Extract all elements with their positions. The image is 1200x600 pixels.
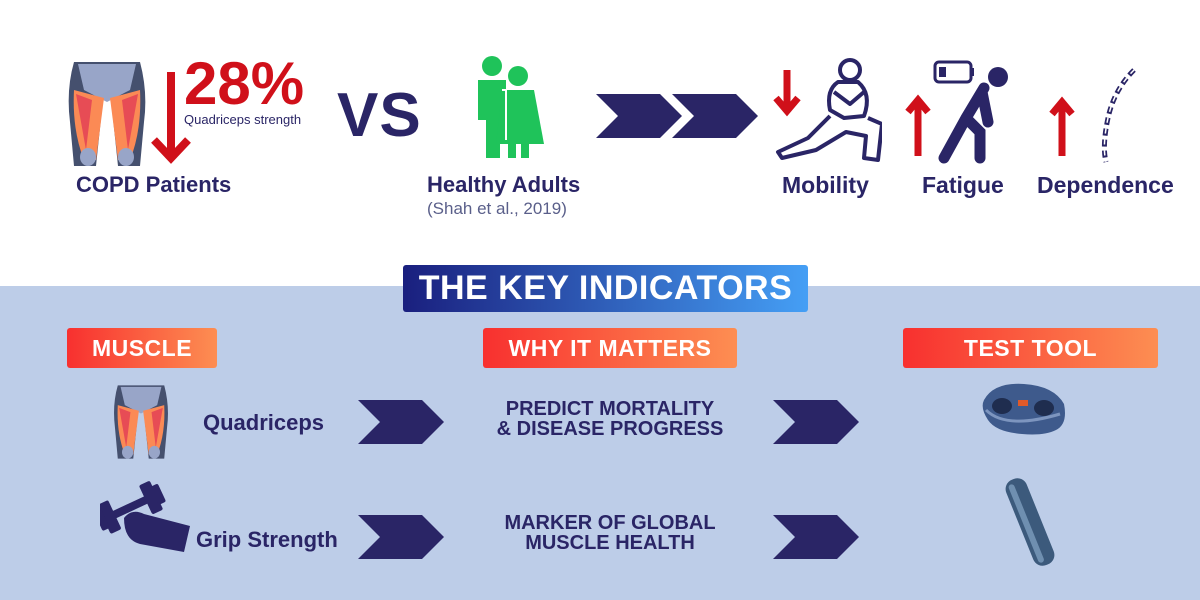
background band [0, 286, 1200, 600]
header: TEST TOOL: TEST TOOL [964, 335, 1097, 361]
row 1 text [497, 398, 723, 440]
icon: down arrow red [151, 72, 191, 164]
label: Mobility: Mobility [782, 172, 869, 198]
row 1 text: PREDICT MORTALITY [506, 398, 714, 420]
row 2 text: MUSCLE HEALTH [525, 532, 695, 554]
row 2 text: MARKER OF GLOBAL [504, 512, 716, 534]
row 1 icon: quadriceps [114, 385, 168, 459]
icon: healthy adults [478, 56, 544, 158]
label: Healthy Adults: Healthy Adults [427, 172, 580, 197]
header: MUSCLE [67, 328, 217, 368]
row 1 arrow [358, 400, 444, 444]
header: MUSCLE: MUSCLE [92, 335, 192, 361]
header: TEST TOOL [903, 328, 1158, 368]
icon: fatigue [905, 60, 1008, 164]
row 2 arrow 2 [773, 515, 859, 559]
row 2 label: Grip Strength [196, 527, 338, 552]
icon: quadriceps legs top [68, 62, 146, 166]
label: Dependence: Dependence [1037, 172, 1174, 198]
row 1 text: & DISEASE PROGRESS [497, 418, 723, 440]
label: Fatigue: Fatigue [922, 172, 1004, 198]
icon: mobility [773, 58, 882, 162]
row 2 arrow [358, 515, 444, 559]
stat 28%: 28% [184, 50, 304, 117]
header: WHY IT MATTERS [483, 328, 737, 368]
header: WHY IT MATTERS: WHY IT MATTERS [509, 335, 711, 361]
row 1 arrow 2 [773, 400, 859, 444]
arrow: double chevron [596, 94, 758, 138]
row 2 text [504, 512, 716, 554]
title banner: THE KEY INDICATORS [419, 269, 792, 307]
row 2 tool: grip dynamometer [1006, 478, 1054, 566]
label: COPD Patients: COPD Patients [76, 172, 231, 197]
citation: (Shah et al., 2019) [427, 199, 567, 218]
row 1 label: Quadriceps [203, 410, 324, 435]
row 2 icon: dumbbell hand [100, 481, 190, 552]
icon: dependence [1049, 68, 1136, 163]
text: VS: VS [337, 81, 422, 150]
stat caption: Quadriceps strength [184, 112, 301, 127]
row 1 tool: dynamometer [982, 384, 1065, 434]
